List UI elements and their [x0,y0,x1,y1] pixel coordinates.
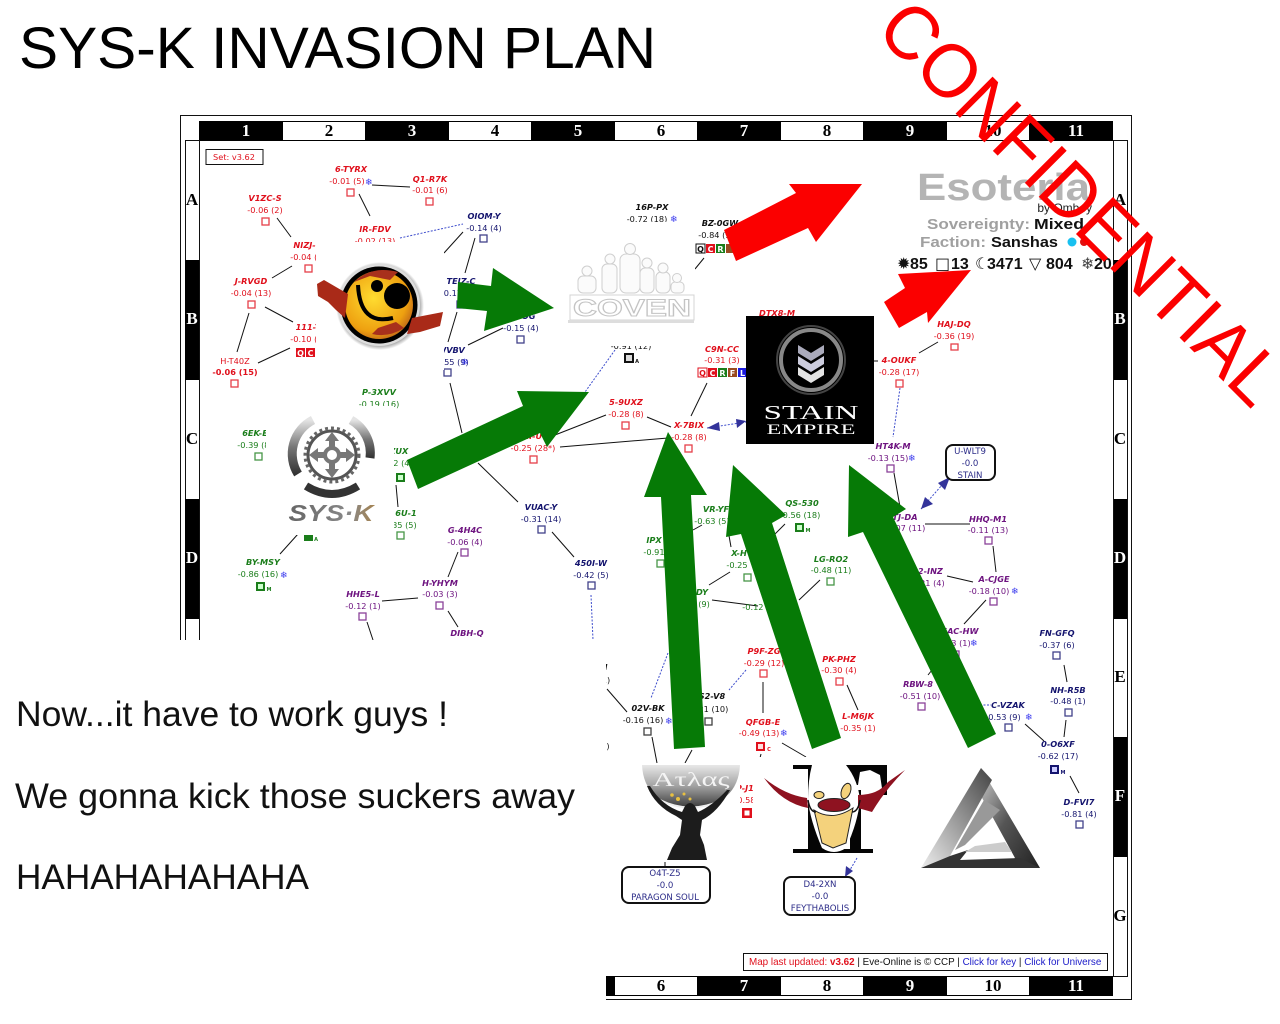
green systems, centre: -0.48 (11) [811,565,851,575]
black systems: R [717,245,724,254]
blue systems, south-east [985,628,1097,828]
right ruler: G [1113,906,1127,925]
central red systems: L [740,369,745,378]
green systems, west: T-ZUX [382,446,409,456]
right ruler: B [1114,309,1126,328]
purple systems, east: HT4K-M [875,441,911,451]
green systems, centre: X-H [730,548,747,558]
black systems: S2-V8 [699,691,726,701]
blue systems, south-east: 0-O6XF [1041,739,1075,749]
logo: triangle alliance [918,765,1045,870]
arrow: green up centre [726,465,841,749]
green systems, west: -0.35 (5) [381,520,417,530]
title: SYS-K INVASION PLAN [19,16,656,81]
black systems [602,202,739,751]
green systems, centre: DY [696,587,709,597]
arrow: red upper [724,184,862,261]
bottom ruler: 8 [823,976,831,995]
purple systems, east: -0.11 (13) [968,525,1008,535]
green systems, west: BY-MSY [246,557,281,567]
top ruler: 2 [325,121,333,140]
blue systems, south-east: -0.48 (1) [1050,696,1086,706]
right ruler: D [1114,548,1126,567]
top ruler: 9 [906,121,914,140]
green systems, west: A [314,537,318,543]
black systems: C [708,245,714,254]
callout: O4T-Z5: O4T-Z5 [649,869,681,879]
top ruler: 4 [491,121,500,140]
red systems, north-west: -0.04 (4) [290,252,326,262]
central red systems: -0.31 (3) [704,355,740,365]
blue systems, north: -0.14 (4) [466,223,502,233]
map footer: Map last updated: v3.62 | Eve-Online is © CCP | Click for key | Click for Universe [749,957,1102,968]
region info: Esoteria: □ [935,254,950,273]
green systems, west: -0.19 (16) [359,399,399,409]
region info: Esoteria: ✹ [897,254,910,273]
left ruler [185,140,200,640]
map footer [744,954,1108,970]
central red systems: 5-9UXZ [609,397,644,407]
left ruler: D [186,548,198,567]
blue systems, north [433,211,609,589]
arrow: green up to X-7BIX [644,432,707,749]
logo: clown F alliance [753,757,905,855]
red systems, north-west: C [308,349,314,358]
red systems, south: PK-PHZ [822,654,857,664]
purple systems, east: -0.13 (15) [868,453,908,463]
red systems, south: -0.29 (12) [744,658,784,668]
red systems, south [734,646,876,818]
red systems, north-west: Q1-R7K [413,174,448,184]
central red systems: C [710,369,716,378]
black systems: -0.84 (9) [698,230,734,240]
dotted regional links [400,224,991,875]
region info: Esoteria: Faction: [920,234,986,251]
region info: Esoteria: ▽ [1029,254,1042,273]
green systems, west: -0.39 (8) [237,440,273,450]
region info: Esoteria: Sovereignty: [927,216,1030,233]
blue systems, north: 450I-W [574,558,608,568]
red systems, south: P-J1X [736,783,761,793]
blue systems, south-east: M [1061,770,1066,776]
red systems, south: ❄ [780,729,788,739]
left ruler: A [186,190,199,209]
blue systems, south-east: -0.37 (6) [1039,640,1075,650]
blue systems, north: 0.17 (2) [444,288,476,298]
black systems: -0.16 (16) [623,715,663,725]
logo: Atlas: Ατλας [652,769,730,791]
callout: O4T-Z5: -0.0 [657,881,673,891]
black systems: I [604,662,608,672]
purple systems, south-west: HHE5-L [346,589,380,599]
red systems, north-west: NIZJ-~ [293,240,323,250]
region info: Esoteria: Esoteria [917,167,1091,209]
callout: O4T-Z5: PARAGON SOUL [631,893,699,903]
top ruler: 3 [408,121,416,140]
right ruler: A [1114,190,1127,209]
red systems, north-west: -0.01 (6) [412,185,448,195]
bottom ruler [199,976,1113,996]
bottom ruler: 9 [906,976,914,995]
black systems: -0.72 (18) [627,214,667,224]
top ruler: 8 [823,121,831,140]
central red systems: DTX8-M [759,308,795,318]
central red systems: F [730,369,735,378]
bottom ruler: 10 [984,976,1002,995]
red systems, north-west: -0.06 (2) [247,205,283,215]
blue systems, south-east: -0.62 (17) [1038,751,1078,761]
central red systems [511,308,974,463]
green systems, centre: LG-RO2 [814,554,848,564]
logo: Stain Empire: STAIN [764,402,858,424]
callout: D4-2XN [784,877,855,915]
red systems, north-west [212,164,448,387]
blue systems, south-east: -0.53 (9) [985,712,1021,722]
blue systems, south-east: NH-R5B [1050,685,1086,695]
region info: Esoteria: Mixed [1034,216,1084,233]
green systems, centre: -0.63 (5) [694,516,730,526]
blue systems, north: WVBV [437,345,465,355]
red systems, north-west: V1ZC-S [248,193,282,203]
red systems, south: P9F-ZG [748,646,781,656]
red systems, north-west: Q [297,349,304,358]
purple systems, south-west: DIBH-Q [450,628,484,638]
purple systems, south-west: -0.12 (1) [345,601,381,611]
blue systems, south-east: ❄ [1025,713,1033,723]
central red systems: -0.28 (8) [608,409,644,419]
central red systems: -0.28 (8) [671,432,707,442]
central red systems: -0.36 (19) [934,331,974,341]
green systems, centre: -0.91 [643,547,665,557]
logo: Stain Empire: EMPIRE [766,422,856,438]
logo: Atlas [612,763,740,862]
callout: U-WLT9: STAIN [958,471,982,481]
central red systems: X-7BIX [673,420,705,430]
black systems: 16P-PX [636,202,669,212]
region info: Esoteria: 20 [1094,256,1112,273]
top ruler: 11 [1068,121,1084,140]
icons: link arrowheads [707,419,950,877]
red systems, north-west: ❄ [365,178,373,188]
top ruler: 10 [984,121,1002,140]
region info: Esoteria: ❄ [1081,254,1094,273]
callout: U-WLT9 [946,445,995,481]
blue systems, north: -0.55 (9) [433,357,469,367]
blue systems, north: -0.15 (4) [503,323,539,333]
red systems, south: QFGB-E [746,717,781,727]
red systems, south: C [767,747,771,753]
black systems: -0.91 (12) [611,341,651,351]
green systems, west: 6EK-E [242,428,268,438]
black systems: A [635,359,639,365]
purple systems, east: ❄ [1011,587,1019,597]
region info: Esoteria: 13 [951,256,969,273]
map frame [180,116,1132,1000]
red systems, south: -0.49 (13) [739,728,779,738]
central red systems: HAJ-DQ [937,319,971,329]
bottom ruler: 7 [740,976,749,995]
red systems, south: -0.35 (1) [840,723,876,733]
arrow: green north-east [407,391,589,489]
top ruler: 6 [657,121,665,140]
green systems, west: ❄ [280,571,288,581]
version tag: Set: v3.62 [213,152,255,162]
green systems, centre: -0.56 (18) [780,510,820,520]
callout: O4T-Z5 [622,867,710,903]
version tag [206,150,263,164]
text block: taunts: We gonna kick those suckers away [15,776,575,816]
green systems, centre: VR-YF [703,504,730,514]
black systems: -0.21 (10) [688,704,728,714]
callout: D4-2XN: -0.0 [812,892,828,902]
top ruler: 5 [574,121,582,140]
top ruler: 7 [740,121,749,140]
green systems, west: -0.86 (16) [238,569,278,579]
red systems, south: L-M6JK [842,711,875,721]
right ruler: F [1115,786,1125,805]
red systems, north-west: -0.02 (13) [355,236,395,246]
blue systems, north: TEIZ-C [447,276,475,286]
blue systems, north: -0.42 (5) [573,570,609,580]
region info: Esoteria: 804 [1046,256,1073,273]
black systems: 1) [602,675,610,685]
purple systems, east: -0.18 (10) [969,586,1009,596]
text block: taunts: HAHAHAHAHAHA [16,857,309,897]
red systems, south: -0.30 (4) [821,665,857,675]
central red systems: C9N-CC [705,344,739,354]
central red systems: -0.25 (28*) [511,443,555,453]
central red systems: Q [699,369,706,378]
green systems, west: M [267,587,272,593]
left ruler: C [186,429,198,448]
central red systems: EI-UV [523,431,549,441]
blue systems, south-east: D-FVI7 [1063,797,1095,807]
purple systems, east: -0.33 (1) [935,638,971,648]
red systems, north-west: 6-TYRX [335,164,368,174]
text block: taunts [15,694,575,897]
bottom ruler: 6 [657,976,665,995]
logo: SYS-K: SYS·K [288,500,375,526]
green systems, centre: (9) [698,599,710,609]
black systems: Q [697,245,704,254]
callout: D4-2XN: FEYTHABOLIS [791,904,849,914]
blue systems, south-east: FN-GFQ [1039,628,1075,638]
purple systems, east: A-CJGE [977,574,1010,584]
blue systems, south-east: -0.81 (4) [1061,809,1097,819]
region info: Esoteria: ☾ [975,254,989,273]
region info: Esoteria: 85 [910,256,928,273]
blue systems, south-east: C-VZAK [991,700,1026,710]
purple systems, east [868,441,1019,710]
black systems: BZ-0GW [702,218,739,228]
red systems, north-west: -0.10 (2) [290,334,326,344]
green systems, west: 6U-1 [395,508,417,518]
purple systems, east: ❄ [908,454,916,464]
region info: Esoteria: Sanshas [991,234,1058,251]
right ruler [1113,140,1127,977]
green systems, west: -0.22 (4) [377,458,413,468]
arrow: red lower [884,270,971,328]
region info: Esoteria: by Ombey [1037,201,1092,215]
central red systems: 4-OUKF [881,355,917,365]
green systems, centre: IPX [646,535,662,545]
right ruler: E [1114,667,1126,686]
blue systems, north: VUAC-Y [525,502,558,512]
red systems, north-west: J-RVGD [233,276,268,286]
region info: Esoteria: 3471 [987,256,1023,273]
central red systems: R [719,369,726,378]
black systems: ❄ [665,717,673,727]
green systems, centre: -0.25 [726,560,748,570]
logo: Stain Empire [746,316,874,444]
purple systems, east: TJ-DA [892,512,918,522]
right ruler: C [1114,429,1126,448]
logo: Coven [566,222,695,346]
black systems: ) [606,741,610,751]
region info: Esoteria [897,167,1112,273]
purple systems, south-west: G-4H4C [448,525,482,535]
red systems, north-west: H-T40Z [220,356,250,366]
purple systems, south-west: H-YHYM [422,578,458,588]
purple systems, east: D2-INZ [911,566,944,576]
purple systems, east: 5AC-HW [941,626,980,636]
green systems, centre [643,498,851,612]
red systems, north-west: -0.04 (13) [231,288,271,298]
purple systems, east: -0.21 (4) [909,578,945,588]
purple systems, east: RBW-8 [903,679,933,689]
green systems, centre: M [806,528,811,534]
callout: D4-2XN: D4-2XN [804,880,836,890]
central red systems: -0.28 (17) [879,367,919,377]
connection lines [237,185,1079,866]
text block: taunts: Now...it have to work guys ! [16,694,448,734]
purple systems, south-west: -0.06 (4) [447,537,483,547]
callout: U-WLT9: U-WLT9 [954,447,986,457]
logo: SYS-K [266,406,394,535]
logo: smiley pirate alliance [316,242,444,370]
purple systems, east: -0.07 (11) [885,523,925,533]
white page area masking the map [0,640,606,1024]
arrow: green to Coven [457,268,554,331]
purple systems, east: ❄ [970,639,978,649]
blue systems, north: EB-OG [507,311,536,321]
black systems: 02V-BK [631,703,665,713]
red systems, north-west: -0.06 (15) [212,367,258,377]
bottom ruler: 11 [1068,976,1084,995]
logo: Coven: COVEN [573,295,691,322]
red systems, south: -0.58 (7) [734,795,770,805]
green systems, centre: -0.12 (5) [742,602,778,612]
blue systems, north: OIOM-Y [467,211,502,221]
black systems: ❄ [670,215,678,225]
purple systems, east: -0.51 (10) [900,691,940,701]
top ruler: 1 [242,121,250,140]
blue systems, north: -0.31 (14) [521,514,561,524]
red systems, north-west: IR-FDV [359,224,391,234]
purple systems, east: HHQ-M1 [969,514,1007,524]
top ruler [199,121,1113,141]
purple systems, south-west [345,525,484,638]
green systems, west: P-3XVV [362,387,397,397]
green systems, centre: QS-530 [785,498,819,508]
callout: U-WLT9: -0.0 [962,459,978,469]
green systems, west [237,387,417,593]
blue systems, north: ❄ [461,358,469,368]
arrow: green up east [848,465,996,748]
red systems, north-west: -0.01 (5) [329,176,365,186]
left ruler: B [186,309,198,328]
purple systems, south-west: -0.03 (3) [422,589,458,599]
red systems, north-west: 111-T [296,322,322,332]
